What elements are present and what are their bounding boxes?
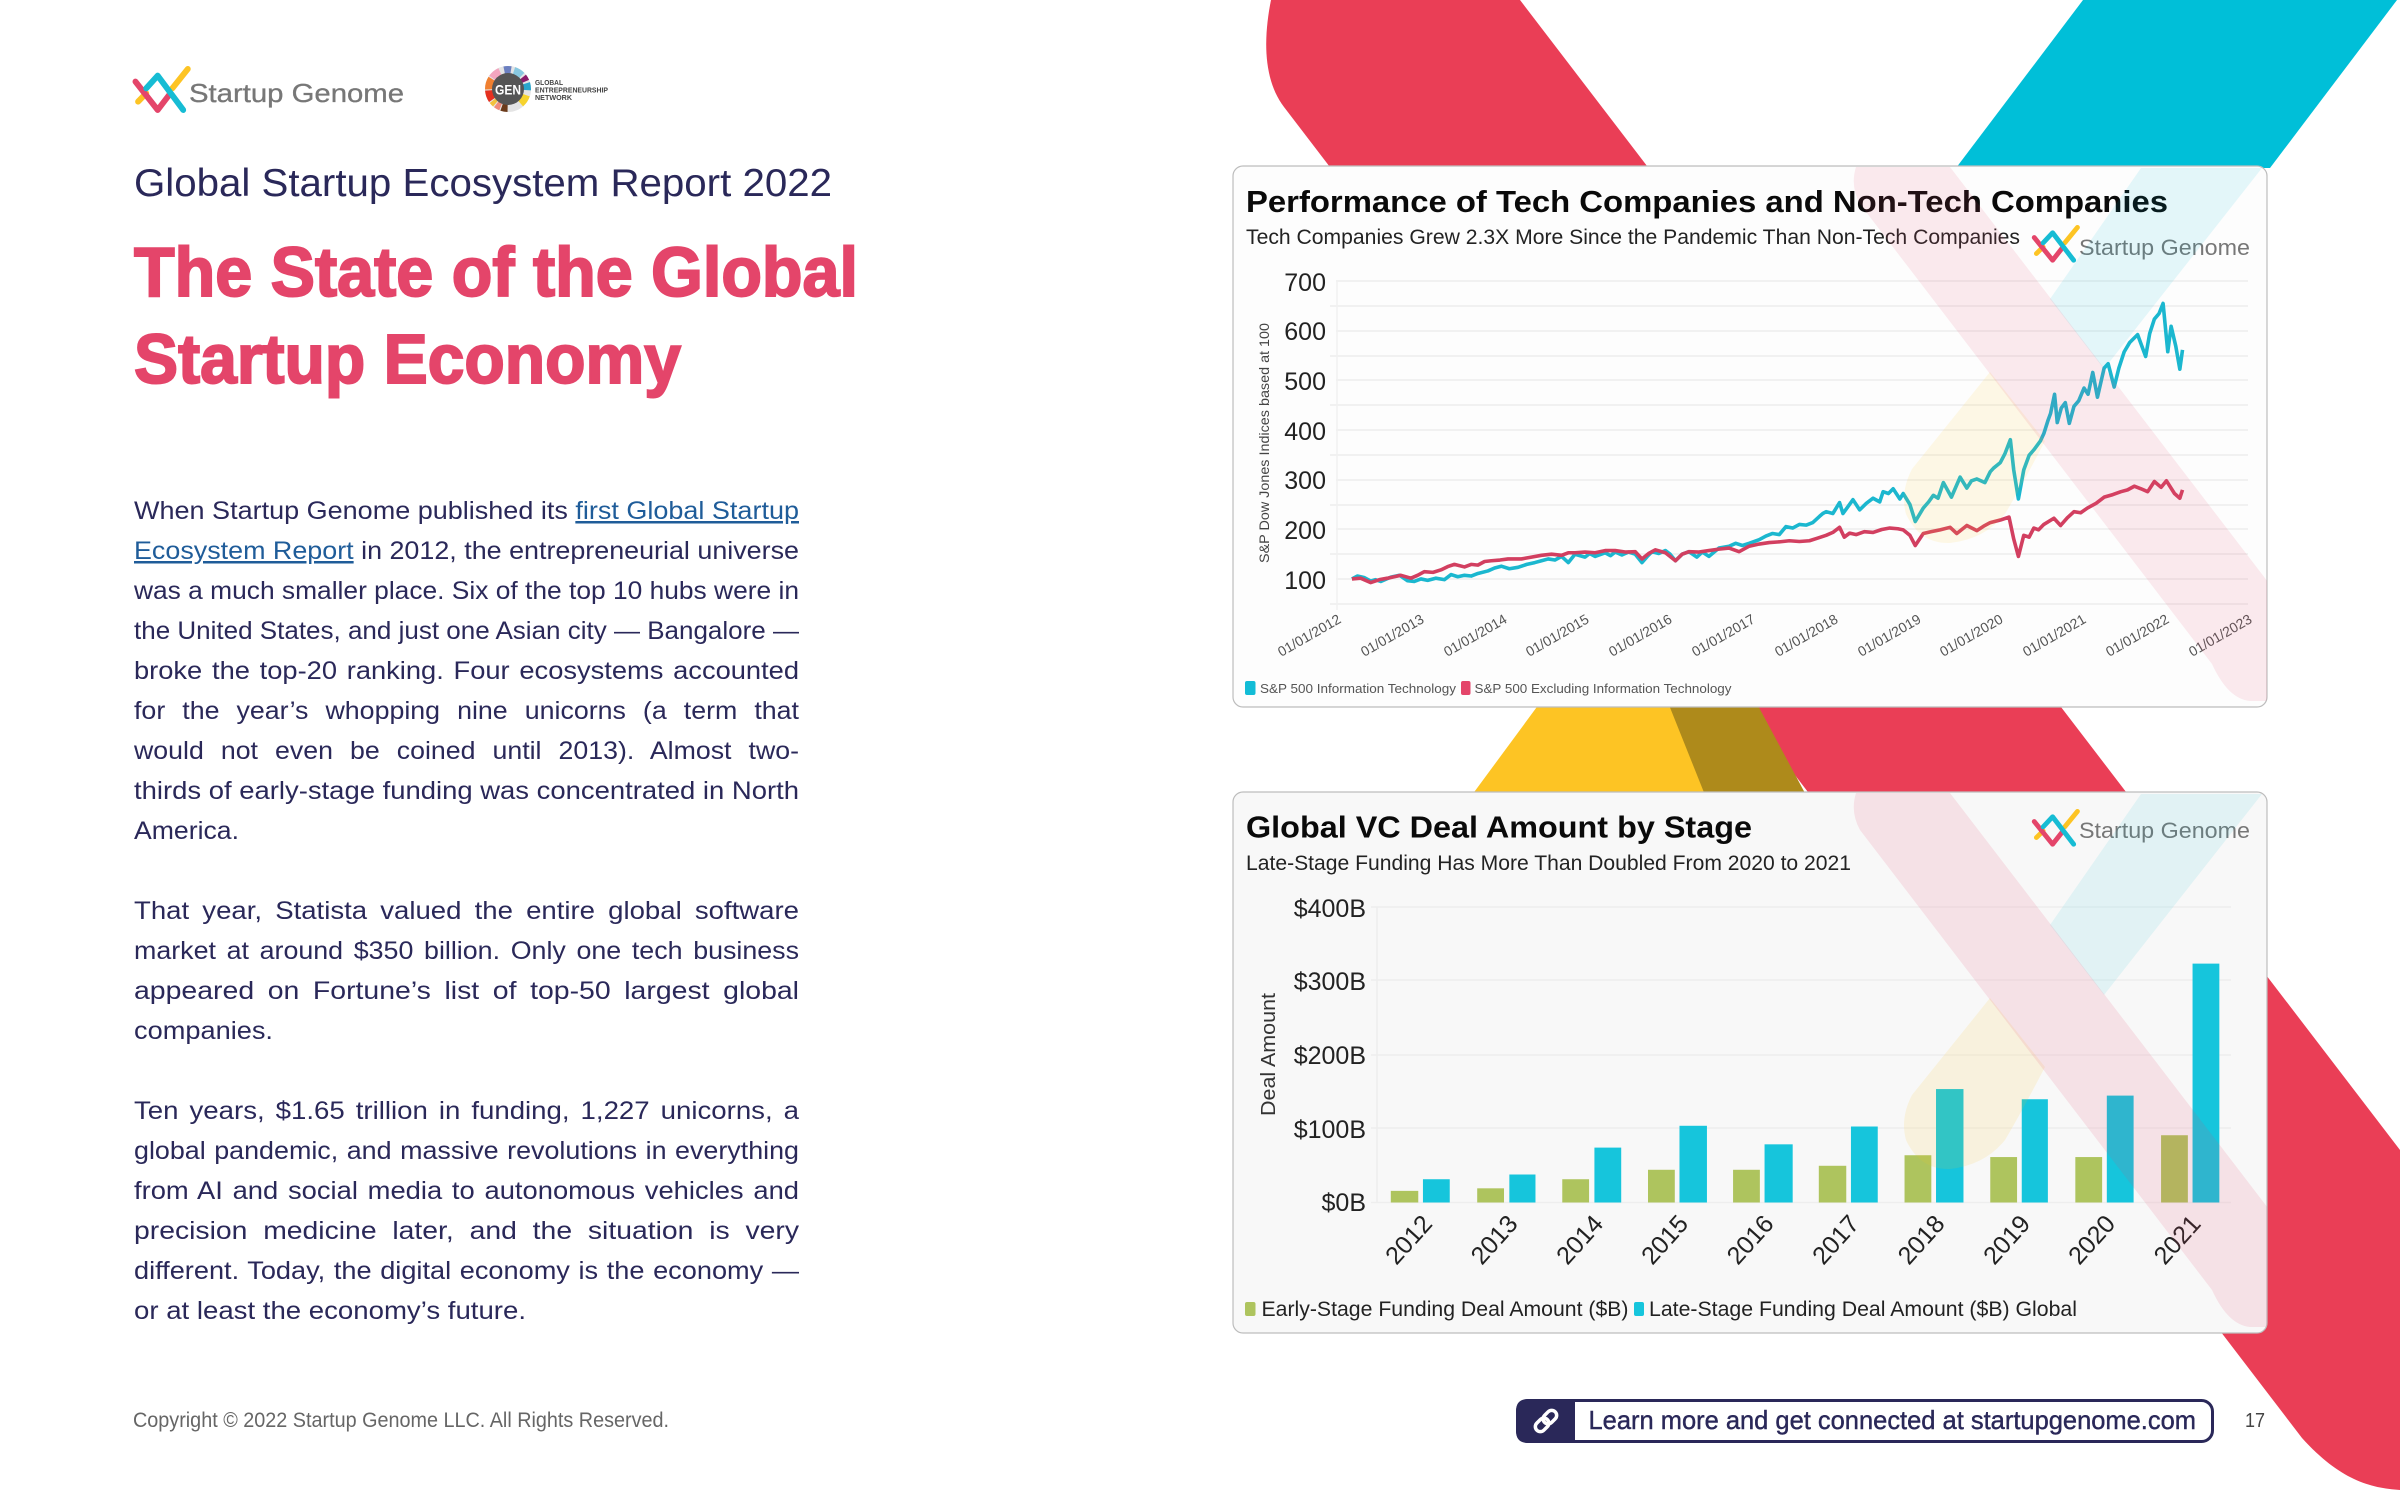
legend: bar chart: Late-Stage Funding Deal Amount ($B) Global (1649, 1298, 2077, 1321)
y axis title: S&P Dow Jones Indices based at 100 (1256, 323, 1272, 563)
logo: Startup Genome (135, 69, 404, 110)
background shape: cyan diagonal band (1956, 0, 2397, 168)
chart subtitle: Late-Stage Funding Has More Than Doubled From 2020 to 2021 (1246, 852, 1851, 875)
legend: bar chart: Early-Stage Funding Deal Amount ($B) (1262, 1298, 1628, 1321)
legend: bar chart (1245, 1298, 2077, 1321)
paragraph 3: from AI and social media to autonomous vehicles and (134, 1177, 799, 1205)
x axis labels: 2013 (1465, 1210, 1524, 1270)
line: S&P 500 Information Technology (1352, 303, 2183, 581)
panel logo (2034, 811, 2250, 844)
legend: line chart (1245, 681, 1732, 696)
logo: Startup Genome: Startup Genome (189, 78, 404, 108)
y axis labels: $0B (1322, 1189, 1366, 1217)
paragraph 1: Ecosystem Report in 2012, the entrepreneurial universe (134, 537, 799, 565)
background shape: red diagonal band (1266, 0, 2400, 1490)
panel logo: Startup Genome (2079, 818, 2250, 843)
paragraph 1: When Startup Genome published its first Global Startup (134, 497, 799, 525)
x axis labels: 01/01/2019 (1855, 611, 1924, 660)
panel logo (2034, 227, 2250, 260)
main heading (134, 233, 858, 398)
x axis labels (1380, 1210, 2207, 1270)
panel logo: Startup Genome (2079, 235, 2250, 260)
x axis labels: 01/01/2016 (1606, 611, 1675, 660)
y axis title: Deal Amount (1258, 993, 1280, 1116)
y axis labels: $100B (1294, 1116, 1366, 1144)
report title: Global Startup Ecosystem Report 2022 (134, 162, 832, 205)
x axis labels: 01/01/2012 (1275, 611, 1344, 660)
main heading: The State of the Global (134, 233, 858, 311)
x axis labels: 01/01/2017 (1689, 611, 1758, 660)
page number: 17 (2245, 1410, 2265, 1432)
y axis labels: 100 (1284, 567, 1326, 595)
grid lines (1371, 907, 2231, 1203)
x axis labels: 01/01/2023 (2186, 611, 2255, 660)
y axis labels: 300 (1284, 467, 1326, 495)
logo: Global Entrepreneurship Network: GLOBAL (535, 78, 563, 87)
paragraph 3: global pandemic, and massive revolutions in everything (134, 1137, 799, 1165)
paragraph 3: Ten years, $1.65 trillion in funding, 1,227 unicorns, a (134, 1097, 799, 1125)
body text (133, 497, 800, 1325)
icon: chain link (1533, 1408, 1559, 1434)
background shape: dark gold overlap (1667, 700, 1806, 795)
x axis labels (1275, 611, 2255, 660)
x axis labels: 2017 (1807, 1210, 1865, 1270)
paragraph 1: thirds of early-stage funding was concentrated in North (134, 777, 799, 805)
x axis labels: 2015 (1636, 1210, 1694, 1270)
paragraph 1: was a much smaller place. Six of the top 10 hubs were in (133, 577, 799, 605)
late-stage bars (1423, 964, 2219, 1203)
line: S&P 500 excluding Information Technology (1352, 481, 2183, 583)
x axis labels: 01/01/2015 (1523, 611, 1592, 660)
button label: Learn more and get connected at startupgenome.com (1588, 1405, 2196, 1435)
x axis labels: 01/01/2021 (2020, 611, 2089, 660)
legend: line chart: S&P 500 Excluding Information Technology (1474, 681, 1732, 696)
x axis labels: 01/01/2014 (1441, 611, 1510, 660)
paragraph 1: for the year’s whopping nine unicorns (a term that (134, 697, 799, 725)
copyright: Copyright © 2022 Startup Genome LLC. All Rights Reserved. (133, 1409, 669, 1432)
link button (1516, 1399, 2212, 1443)
legend: line chart: S&P 500 Information Technology (1260, 681, 1457, 696)
paragraph 1: would not even be coined until 2013). Almost two- (133, 737, 799, 765)
x axis labels: 2016 (1721, 1210, 1780, 1270)
y axis labels: 200 (1284, 517, 1326, 545)
x axis labels: 2020 (2063, 1210, 2121, 1270)
y axis labels: 400 (1284, 418, 1326, 446)
paragraph 2 (134, 897, 799, 1045)
x axis labels: 01/01/2022 (2103, 611, 2172, 660)
paragraph 2: That year, Statista valued the entire global software (134, 897, 799, 925)
paragraph 1: America. (134, 817, 239, 845)
paragraph 1 (133, 497, 799, 845)
y axis labels: 700 (1284, 269, 1326, 297)
panel: global VC deal amount by stage (1233, 792, 2268, 1333)
chart title: Global VC Deal Amount by Stage (1246, 810, 1752, 844)
grid lines (1330, 281, 2248, 610)
y axis labels: $200B (1294, 1042, 1366, 1070)
chart title: Performance of Tech Companies and Non-Tech Companies (1246, 184, 2168, 219)
x axis labels: 01/01/2020 (1937, 611, 2006, 660)
y axis labels: $400B (1294, 895, 1366, 923)
panel: tech vs non-tech performance (1233, 166, 2268, 707)
paragraph 2: market at around $350 billion. Only one tech business (134, 937, 799, 965)
paragraph 1: the United States, and just one Asian city — Bangalore — (134, 617, 799, 645)
logo: Global Entrepreneurship Network: NETWORK (535, 93, 573, 102)
paragraph 3: precision medicine later, and the situation is very (134, 1217, 800, 1245)
paragraph 1: broke the top-20 ranking. Four ecosystems accounted (134, 657, 799, 685)
bars (1391, 964, 2219, 1203)
x axis labels: 2019 (1978, 1210, 2036, 1270)
paragraph 3: or at least the economy’s future. (134, 1297, 526, 1325)
paragraph 3 (134, 1097, 800, 1325)
watermark: logo shape behind line chart (1854, 167, 2268, 701)
x axis labels: 2014 (1551, 1210, 1609, 1270)
early-stage bars (1391, 1135, 2188, 1203)
x axis labels: 01/01/2013 (1358, 611, 1427, 660)
paragraph 3: different. Today, the digital economy is the economy — (134, 1257, 799, 1285)
background shape: yellow band (1472, 700, 1708, 795)
chart subtitle: Tech Companies Grew 2.3X More Since the Pandemic Than Non-Tech Companies (1246, 226, 2020, 249)
main heading: Startup Economy (134, 320, 681, 398)
y axis labels (1294, 895, 1366, 1217)
logo: Global Entrepreneurship Network (489, 70, 608, 108)
y axis labels: 500 (1284, 368, 1326, 396)
y axis labels: $300B (1294, 968, 1366, 996)
watermark: logo shape over bar chart (1854, 793, 2268, 1327)
paragraph 2: companies. (134, 1017, 273, 1045)
x axis labels: 2021 (2148, 1210, 2207, 1270)
x axis labels: 01/01/2018 (1772, 611, 1841, 660)
x axis labels: 2012 (1380, 1210, 1438, 1270)
x axis labels: 2018 (1892, 1210, 1951, 1270)
y axis labels (1284, 269, 1326, 595)
logo: Global Entrepreneurship Network: GEN (495, 82, 521, 98)
logo: Global Entrepreneurship Network: ENTREPRENEURSHIP (535, 86, 608, 94)
paragraph 2: appeared on Fortune’s list of top-50 largest global (134, 977, 799, 1005)
y axis labels: 600 (1284, 318, 1326, 346)
